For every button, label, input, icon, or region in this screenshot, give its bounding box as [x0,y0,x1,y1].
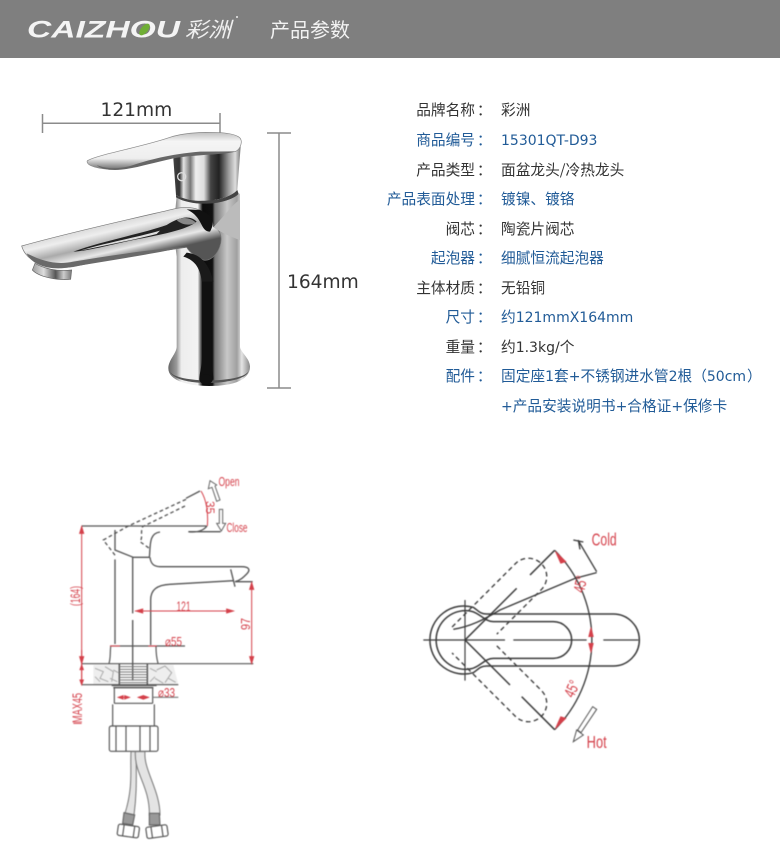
row: material: 无铅铜 [501,277,545,298]
row: brand: 品牌名称 [416,99,475,120]
header title: 产品参数 [270,14,350,43]
hose connectors [117,824,140,838]
drawing labels: MAX45 [69,693,85,723]
column dark reflection [199,277,213,379]
height dimension line [267,133,291,388]
header bar [0,0,780,58]
spout highlights [73,218,197,252]
row: surface treatment: 产品表面处理 [387,188,475,209]
height dimension label: 164mm [287,272,359,293]
row: item number: 15301QT-D93 [501,133,597,149]
braided hoses [125,752,160,815]
swing arc [555,550,592,730]
counter stone section [93,665,178,685]
row: item number: 商品编号 [416,129,475,150]
handle lever [87,132,241,169]
lower mounting and hoses [73,650,178,839]
product photo with dimensions [21,100,359,389]
row: product type: ： [477,159,492,180]
top view labels: 45° [571,574,591,594]
row: surface treatment: ： [477,188,492,209]
centre lines [423,600,638,681]
drawing labels: 35 [203,501,217,514]
handle plan outline [430,606,639,674]
row: product type [416,159,624,180]
drawing labels: ⌀33 [158,685,175,700]
faucet aerator [32,263,72,280]
row: size: ： [477,306,492,327]
row: brand [416,99,530,120]
technical drawing: side view [67,474,255,840]
dashed open handle [103,499,186,557]
hot arrow [573,707,597,742]
drawing labels: Open [218,474,240,489]
brand logo: 彩洲 [185,14,234,44]
red arc arrows [555,551,593,729]
coupling nut [109,726,158,751]
drawing labels: 97 [238,618,253,630]
row: brand: ： [477,99,492,120]
rotated handle lines [453,573,597,629]
technical drawing: top view [422,529,641,752]
row: item number: ： [477,129,492,150]
row: aerator [431,247,604,268]
row: valve core: 陶瓷片阀芯 [501,218,574,239]
top view labels: Cold [592,529,617,549]
drawing labels: (164) [67,586,83,606]
faucet body column [168,193,250,386]
open and close arrows [208,481,226,531]
faucet photo [22,132,250,386]
top view labels: Hot [587,732,607,752]
faucet spout [22,207,221,267]
drawing labels: Close [226,520,248,535]
top view labels [562,529,617,752]
swing radial lines [465,550,555,730]
cold arrow [573,540,597,572]
specification table [387,99,762,416]
faucet outline [82,491,221,532]
row: weight [446,336,574,357]
row: weight: 重量 [446,336,475,357]
brand logo: CAIZHOU [27,16,181,44]
row: accessories: 固定座1套+不锈钢进水管2根（50cm） [501,365,762,386]
red dimension lines [80,491,254,680]
row: material: 主体材质 [416,277,475,298]
faucet base shadow [170,372,248,383]
upper faucet side elevation [80,481,254,681]
row: material: ： [477,277,492,298]
dashed handle positions [452,551,554,729]
row: brand: 彩洲 [501,99,530,120]
red clearance dimensions [73,650,148,723]
width dimension label: 121mm [100,100,172,121]
width dimension line [42,113,220,133]
drawing labels: ⌀55 [165,634,182,649]
row: product type: 面盆龙头/冷热龙头 [501,159,624,180]
row: valve core: ： [477,218,492,239]
row: weight: ： [477,336,492,357]
row: weight: 约1.3kg/个 [501,336,574,357]
row: aerator: ： [477,247,492,268]
threaded shank [119,664,147,686]
brand logo [27,14,238,44]
row: surface treatment [387,188,574,209]
row: accessories: ： [477,365,492,386]
row: material [416,277,545,298]
drawing labels [67,474,253,723]
row: accessories continued: +产品安装说明书+合格证+保修卡 [501,395,727,416]
row: size: 尺寸 [446,306,475,327]
drawing labels: 121 [176,598,191,614]
handle cartridge [173,147,241,201]
top view labels: 45° [562,678,584,700]
row: aerator: 起泡器 [431,247,475,268]
row: surface treatment: 镀镍、镀铬 [501,188,574,209]
row: accessories: 配件 [446,365,475,386]
row: product type: 产品类型 [416,159,475,180]
row: size: 约121mmX164mm [501,306,633,327]
row: item number [416,129,597,150]
row: valve core: 阀芯 [446,218,475,239]
row: valve core [446,218,574,239]
row: aerator: 细腻恒流起泡器 [501,247,604,268]
